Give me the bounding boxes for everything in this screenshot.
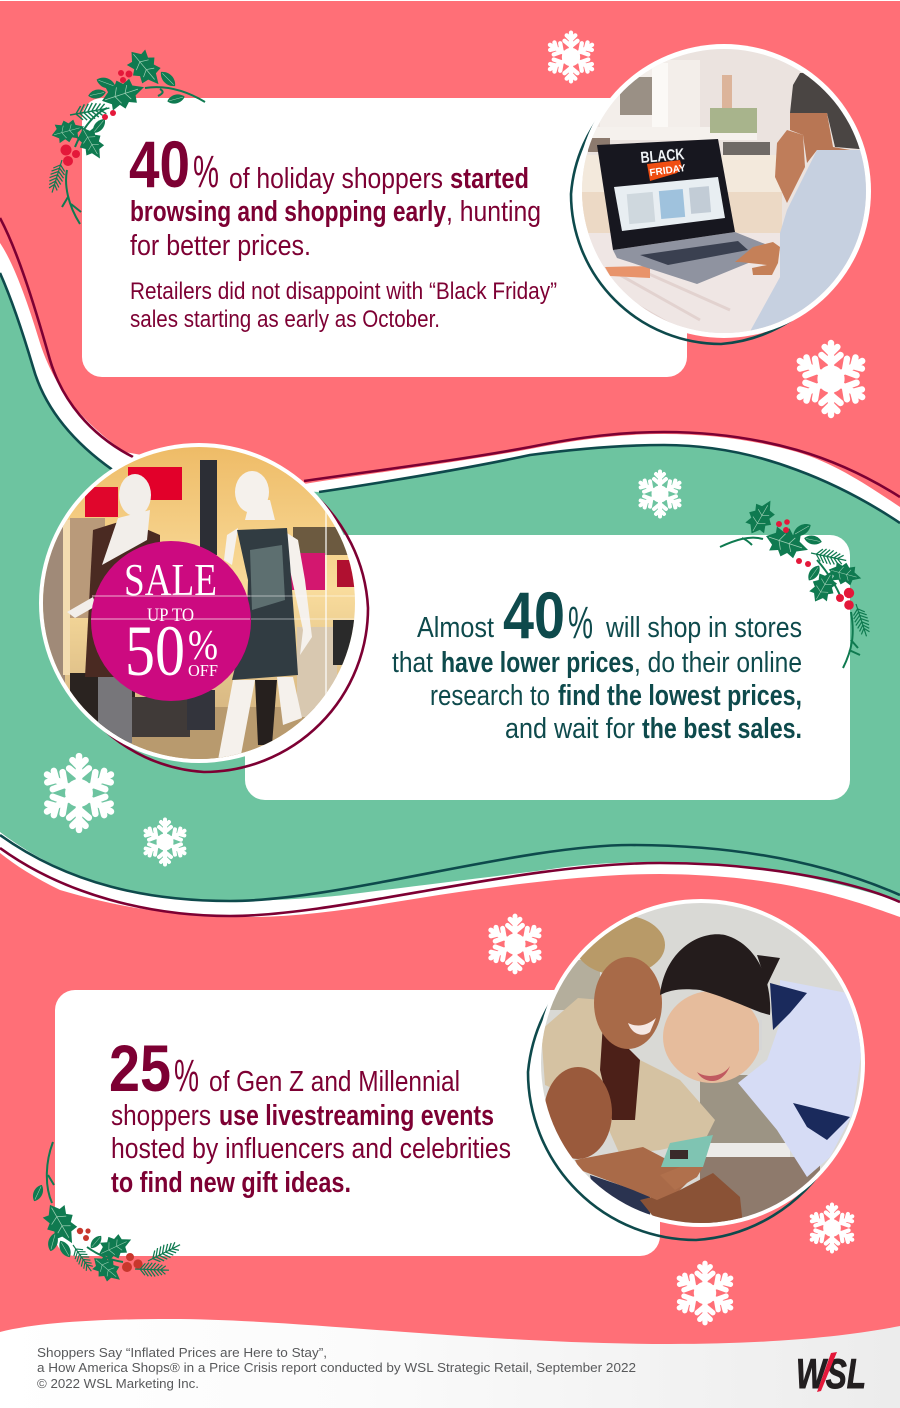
panel: card 1 [82, 98, 687, 377]
photo 1: woman browsing Black Friday sale on laptop [571, 44, 871, 344]
text: 40 percent of holiday shoppers: 40 [129, 127, 190, 201]
text: 25 percent of Gen Z and Millennial shoppers: % [174, 1050, 199, 1101]
sale sticker: UP TO [147, 605, 194, 626]
text: 40 percent of holiday shoppers: sales starting as early as October. [130, 306, 440, 333]
text: 40 percent of holiday shoppers: of holiday shoppers [229, 163, 443, 195]
text: almost 40 percent will shop in stores: 40 [503, 578, 565, 652]
text: 40 percent of holiday shoppers: , hunting [446, 196, 541, 228]
text: 25 percent of Gen Z and Millennial shoppers: to find new gift ideas. [111, 1167, 351, 1199]
holly wreath: card 3 corner [30, 1142, 183, 1288]
photo 3: two young women looking at a phone [528, 899, 865, 1240]
text: almost 40 percent will shop in stores: , do their online [634, 647, 802, 679]
text: almost 40 percent will shop in stores: Almost [417, 612, 494, 644]
sale sticker: 50 [125, 611, 185, 691]
text: almost 40 percent will shop in stores: research to [430, 680, 550, 712]
wave: white band [0, 243, 900, 917]
text: 40 percent of holiday shoppers: % [193, 146, 219, 197]
holly wreath: card 2 corner [720, 494, 873, 668]
text: almost 40 percent will shop in stores: have lower prices [441, 647, 634, 679]
sale sticker: OFF [188, 661, 218, 680]
snowflake 5 [143, 820, 187, 864]
text: 25 percent of Gen Z and Millennial shoppers: use livestreaming events [219, 1100, 494, 1132]
text: almost 40 percent will shop in stores: and wait for [505, 713, 635, 745]
snowflake 3 [638, 472, 682, 516]
text: 25 percent of Gen Z and Millennial shoppers: of Gen Z and Millennial [209, 1066, 460, 1098]
WSL logo: WSL [796, 1350, 866, 1397]
text: almost 40 percent will shop in stores: will shop in stores [605, 612, 802, 644]
laptop screen words: BLACK [640, 146, 686, 167]
text: 40 percent of holiday shoppers: for better prices. [130, 230, 311, 262]
text: 40 percent of holiday shoppers [129, 127, 557, 333]
footer source text: a How America Shops® in a Price Crisis report conducted by WSL Strategic Retail, September 2022 [37, 1360, 636, 1375]
text: 40 percent of holiday shoppers: browsing and shopping early [130, 196, 446, 228]
sale sticker: SALE [124, 554, 217, 605]
panel: card 3 [55, 990, 660, 1256]
text: almost 40 percent will shop in stores [392, 578, 802, 745]
text: almost 40 percent will shop in stores: that [392, 647, 433, 679]
snowflake 7 [809, 1205, 855, 1251]
snowflake 4 [42, 756, 116, 830]
footer source text: © 2022 WSL Marketing Inc. [37, 1376, 199, 1391]
laptop screen words: FRIDAY [649, 163, 687, 179]
text: 40 percent of holiday shoppers: Retailers did not disappoint with “Black Friday” [130, 278, 557, 305]
snowflake 8 [675, 1263, 735, 1323]
text: 25 percent of Gen Z and Millennial shoppers: 25 [109, 1031, 171, 1105]
footer source text [37, 1345, 636, 1391]
sale sticker [91, 541, 251, 701]
laptop screen words [640, 148, 685, 176]
wave lines [0, 218, 900, 916]
footer band [0, 1319, 900, 1408]
text: 40 percent of holiday shoppers: started [450, 163, 529, 195]
text: almost 40 percent will shop in stores: the best sales. [642, 713, 802, 745]
snowflake 2 [795, 343, 867, 415]
snowflake 6 [487, 916, 543, 972]
text: 25 percent of Gen Z and Millennial shoppers: shoppers [111, 1100, 211, 1132]
snowflake 1 [547, 33, 595, 81]
text: almost 40 percent will shop in stores: % [568, 597, 593, 648]
holly wreath: card 1 corner [46, 43, 205, 224]
text: 25 percent of Gen Z and Millennial shoppers [109, 1031, 511, 1199]
wave: green band [0, 272, 900, 902]
text: almost 40 percent will shop in stores: find the lowest prices, [558, 680, 802, 712]
photo 2: shop window with mannequins and sale sticker [39, 443, 368, 772]
sale sticker: % [188, 623, 218, 669]
footer source text: Shoppers Say “Inflated Prices are Here to Stay”, [37, 1345, 327, 1360]
text: 25 percent of Gen Z and Millennial shoppers: hosted by influencers and celebrities [111, 1133, 511, 1165]
panel: card 2 [245, 535, 850, 800]
